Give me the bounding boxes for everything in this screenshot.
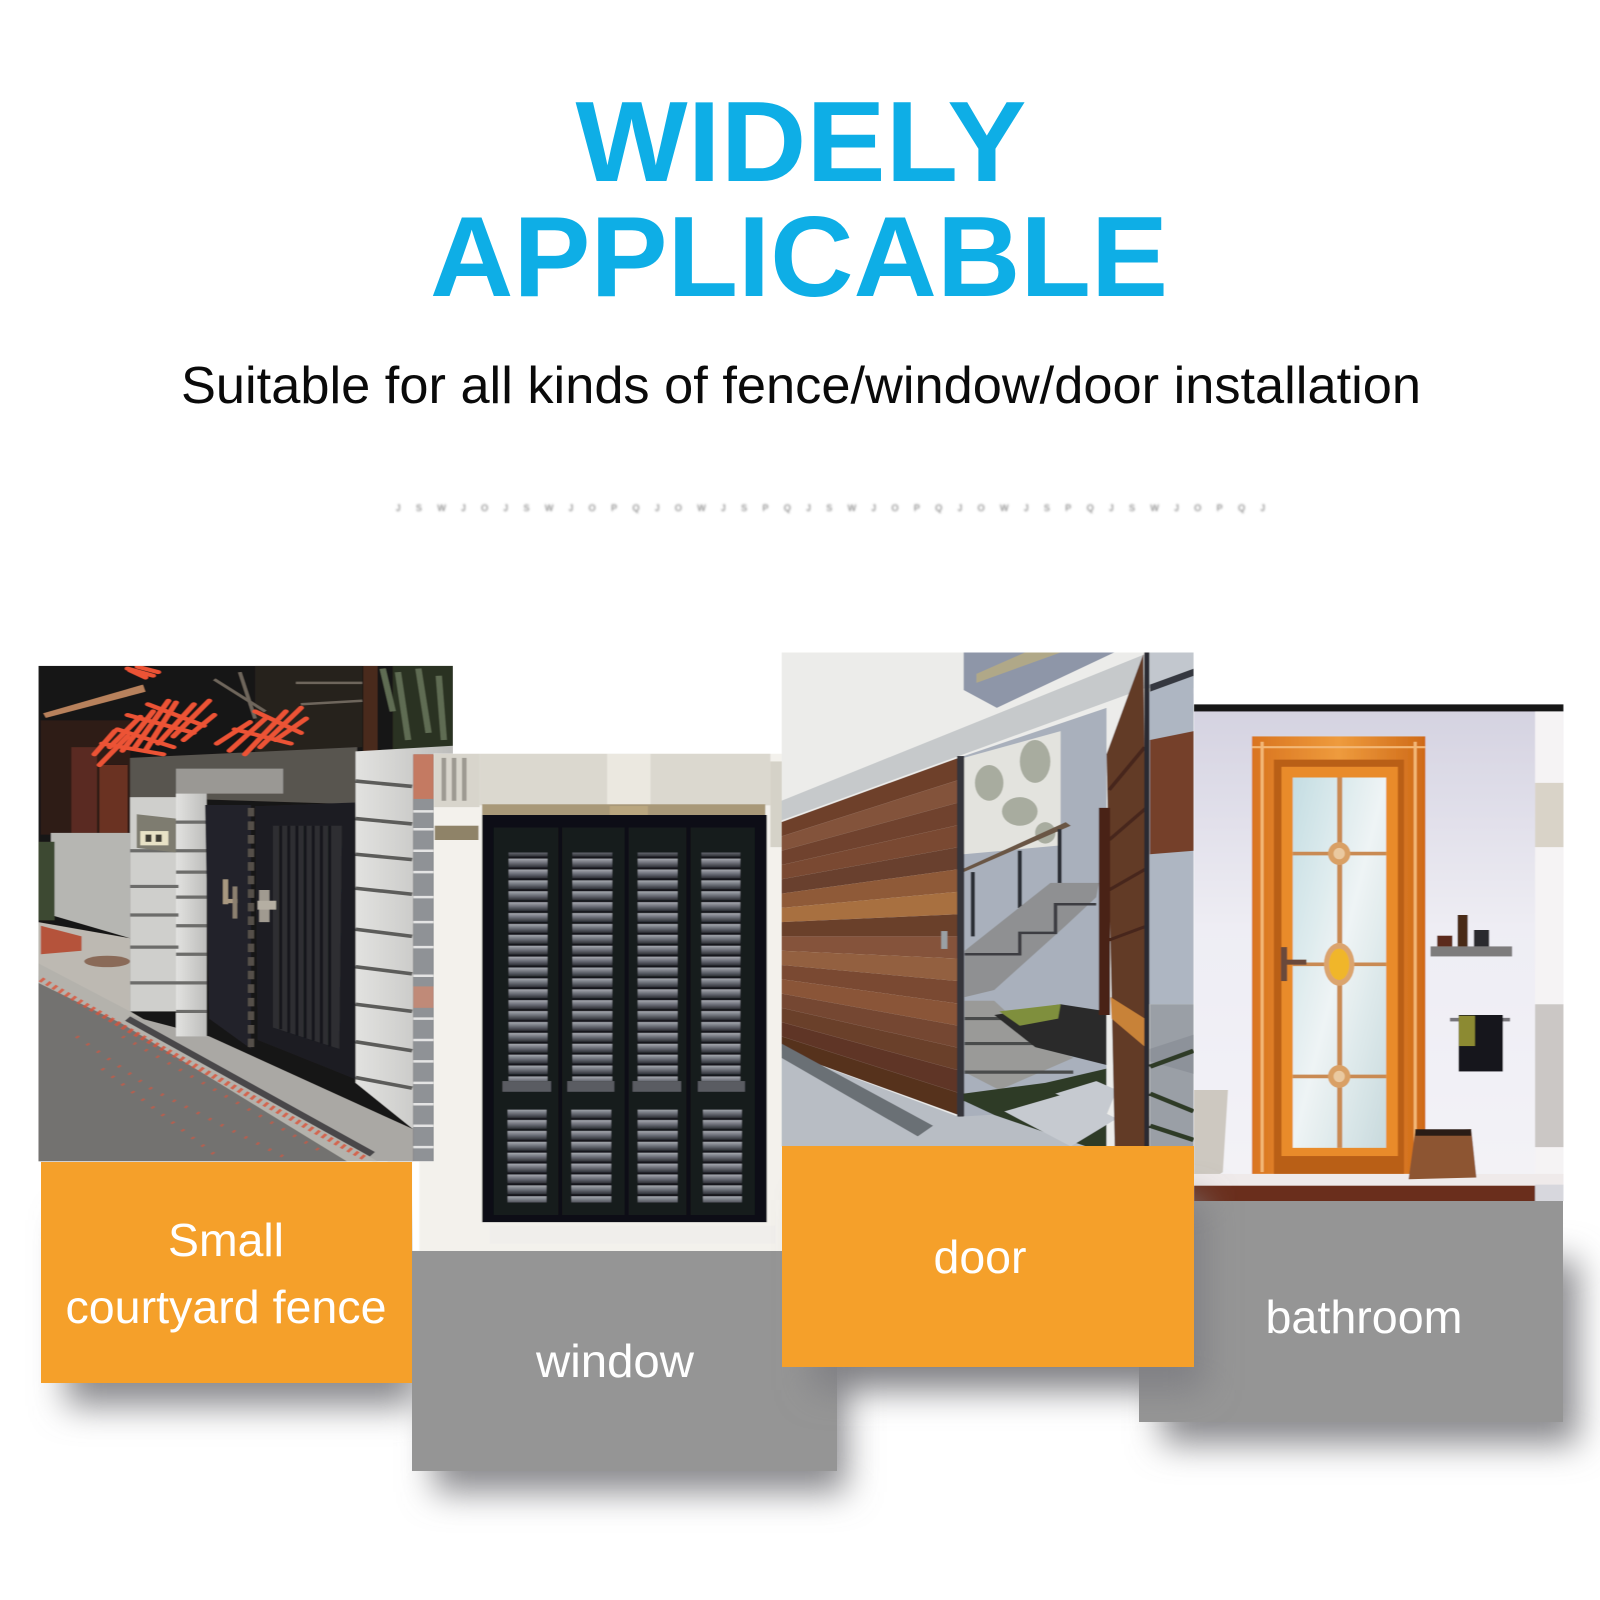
panel: courtyard fence label: courtyard fence bbox=[66, 1281, 386, 1333]
ground with paving bbox=[782, 1004, 1194, 1147]
louvres upper bbox=[509, 852, 740, 1081]
mailbox bbox=[137, 814, 176, 852]
courtyard stone column bbox=[130, 794, 207, 1036]
orange door frame bbox=[1252, 736, 1425, 1174]
red foliage bbox=[94, 667, 306, 765]
panel: door label bbox=[782, 1146, 1194, 1367]
title: APPLICABLE bbox=[430, 194, 1168, 321]
towel bbox=[1450, 1015, 1510, 1071]
panel: bathroom label bbox=[1139, 1201, 1563, 1422]
panel: window label: window bbox=[535, 1335, 695, 1387]
counter bbox=[1194, 1174, 1564, 1202]
card shadows bbox=[66, 1220, 1578, 1492]
stone wall right bbox=[356, 746, 453, 1129]
wooden wall panel bbox=[782, 756, 964, 1117]
copper pot bbox=[1409, 1129, 1476, 1179]
lintel bbox=[480, 754, 783, 847]
door handle bbox=[1281, 947, 1307, 981]
interior stair court bbox=[959, 708, 1107, 1146]
title: WIDELY bbox=[576, 79, 1026, 206]
sink basin bbox=[1194, 1090, 1228, 1181]
brick strip bbox=[413, 754, 434, 1163]
shutter mid rail highlights bbox=[503, 1081, 745, 1092]
panel: door label: door bbox=[934, 1231, 1026, 1283]
gate leaves bbox=[205, 802, 356, 1079]
photo: courtyard fence gate bbox=[38, 666, 453, 1163]
photo: bathroom door bbox=[1194, 704, 1564, 1202]
glass ornaments bbox=[1324, 842, 1354, 1088]
panel: bathroom label: bathroom bbox=[1266, 1291, 1462, 1343]
wall shelf with bottles bbox=[1431, 915, 1512, 956]
photo: window shutters bbox=[408, 754, 786, 1252]
photo: wooden door bbox=[782, 652, 1194, 1147]
panel: window label bbox=[412, 1251, 837, 1471]
open door edge bbox=[1099, 652, 1149, 1147]
title bbox=[430, 79, 1168, 321]
panel: courtyard fence label bbox=[41, 1162, 412, 1383]
fallen red leaves bbox=[41, 979, 367, 1160]
panel: courtyard fence label: Small bbox=[168, 1214, 284, 1266]
subtitle: Suitable for all kinds of fence/window/door installation bbox=[181, 357, 1421, 415]
door card shadow bbox=[812, 1200, 1204, 1390]
faint letter row: JSWJOJSWJOPQJOWJSPQJSWJOPQJOWJSPQJSWJOPQJ bbox=[396, 503, 1265, 513]
shutter frame bbox=[482, 815, 767, 1222]
louvres lower bbox=[508, 1110, 742, 1202]
